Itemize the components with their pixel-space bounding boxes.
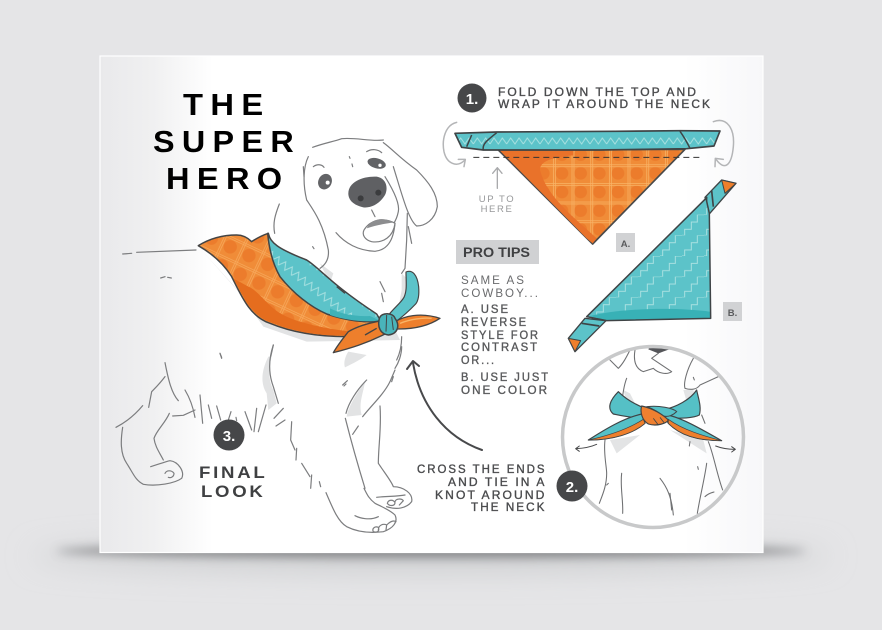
bandana A: teal band: [455, 131, 720, 150]
title: HERO: [166, 161, 290, 196]
curved arrow to knot: [407, 361, 482, 450]
pro tips text: [461, 275, 550, 397]
knot: [641, 406, 668, 425]
step 2 circle illustration: [576, 346, 735, 515]
step 2 text: KNOT AROUND: [435, 490, 546, 502]
badge: step 3: 3.: [223, 428, 235, 445]
pro tips text: COWBOY...: [461, 288, 540, 300]
pro tips heading: [456, 240, 539, 264]
arrow right: [716, 446, 735, 452]
text: final look: FINAL: [199, 463, 268, 482]
bandana: right tail: [395, 315, 440, 329]
left tail: [588, 414, 645, 440]
teal neck right: [663, 390, 700, 418]
step 2 text: CROSS THE ENDS: [417, 464, 546, 476]
label A: [616, 233, 635, 252]
cape darker edge: [233, 278, 351, 336]
body shadow: [262, 352, 367, 417]
cross band: [647, 406, 677, 416]
step 1 heading: WRAP IT AROUND THE NECK: [498, 99, 712, 111]
pro tips text: STYLE FOR: [461, 330, 540, 342]
step 1 heading: [498, 87, 712, 111]
bandana: teal fold: [268, 233, 381, 322]
step 1 heading: FOLD DOWN THE TOP AND: [498, 87, 698, 99]
bandana B: teal triangle: [587, 198, 711, 321]
panel: card: [100, 56, 763, 552]
hind leg: [116, 406, 143, 427]
label B: B.: [728, 308, 737, 319]
curved arrow right: [713, 121, 734, 167]
dog chest lines: [599, 346, 723, 515]
step 1 badge: 1.: [466, 91, 478, 108]
pro tips heading: PRO TIPS: [463, 245, 530, 260]
bandana: teal neck loop: [387, 271, 419, 322]
circle frame: [562, 346, 744, 528]
right tail: [663, 414, 722, 441]
pro tips text: SAME AS: [461, 275, 526, 287]
pro tips text: OR...: [461, 355, 496, 367]
eyes: [316, 172, 334, 192]
label B: [723, 302, 742, 321]
illustration: dog body: [116, 345, 412, 532]
label: up to here: UP TO: [479, 194, 515, 205]
belly fur: [270, 345, 278, 403]
card shadow: [56, 544, 806, 558]
pro tips text: A. USE: [461, 304, 510, 316]
step 2 badge: 2.: [566, 479, 578, 496]
bandana B: top tail: [705, 180, 736, 214]
step 2 text: [417, 464, 546, 514]
up arrow: [493, 168, 502, 188]
label: up to here: [479, 194, 515, 215]
front leg right: [378, 406, 412, 508]
arrow left: [576, 444, 597, 451]
chest: [346, 380, 367, 413]
dog head lines: [123, 138, 437, 360]
teal neck left: [610, 392, 645, 418]
pro tips text: B. USE JUST: [461, 372, 550, 384]
shadow under knot: [610, 390, 707, 453]
title: THE: [183, 87, 270, 122]
title: SUPER: [153, 124, 301, 159]
step 2 text: THE NECK: [471, 502, 546, 514]
bandana: left tail: [333, 321, 385, 353]
illustration: dog head and bandana: [123, 138, 440, 360]
pro tips text: ONE COLOR: [461, 385, 549, 397]
nose: [348, 177, 387, 207]
wide soft shadow: [31, 540, 831, 572]
step 2 badge: [556, 470, 588, 502]
text: final look: LOOK: [201, 482, 266, 501]
bandana: knot: [379, 314, 398, 335]
badge: step 3: [214, 420, 244, 450]
bandana B: bottom tail: [568, 318, 606, 352]
pro tips text: REVERSE: [461, 317, 528, 329]
step 1 badge: [458, 84, 486, 112]
bandana: orange cape: [198, 233, 380, 337]
front leg left: [326, 488, 396, 532]
label A: A.: [621, 239, 630, 250]
text: final look: [199, 463, 268, 501]
bandana A: orange triangle: [498, 149, 685, 244]
curved arrow left: [443, 122, 465, 167]
dashed fold line: [473, 156, 702, 159]
step 2 text: AND TIE IN A: [448, 477, 546, 489]
bandana shadow: [200, 248, 408, 342]
label: up to here: HERE: [481, 204, 513, 215]
title: [153, 87, 301, 196]
illustration: folded bandanas: [443, 121, 736, 352]
pro tips text: CONTRAST: [461, 342, 539, 354]
